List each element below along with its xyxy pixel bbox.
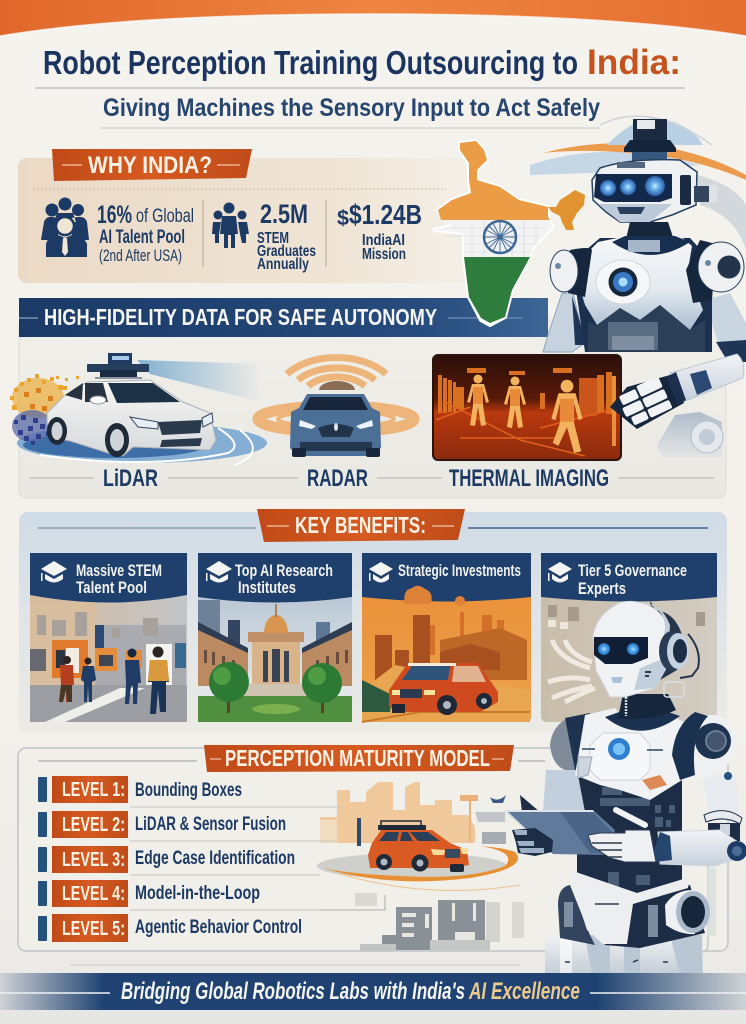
level 3: LEVEL 3: xyxy=(62,849,125,871)
card headers xyxy=(30,553,717,606)
level 1: Bounding Boxes xyxy=(135,780,242,801)
level 3: Edge Case Identification xyxy=(135,848,295,869)
illustration: radar car xyxy=(258,357,414,457)
panel: high-fidelity data xyxy=(10,298,726,498)
legs xyxy=(545,935,703,975)
badge: perception maturity model: PERCEPTION MATURITY MODEL xyxy=(225,745,490,771)
badge: key benefits: KEY BENEFITS: xyxy=(295,512,426,538)
level 1 xyxy=(38,776,242,803)
stat: AI talent pool: (2nd After USA) xyxy=(99,246,182,265)
footer banner: AI Excellence xyxy=(468,978,580,1005)
torso chest xyxy=(575,708,690,800)
icon: graduation cap xyxy=(41,561,67,582)
badge: why India: WHY INDIA? xyxy=(88,152,212,179)
upper arms xyxy=(543,293,746,362)
badge: why India xyxy=(52,149,252,181)
stat: IndiaAI mission: Mission xyxy=(362,246,406,263)
thermal figure xyxy=(467,374,489,426)
map of India xyxy=(433,141,585,325)
level 5 xyxy=(38,914,302,942)
stat: STEM graduates: Graduates xyxy=(257,243,316,260)
smoke puffs xyxy=(404,586,465,606)
label: radar: RADAR xyxy=(307,465,368,492)
stat: IndiaAI mission: IndiaAI xyxy=(362,232,405,249)
level 2: LiDAR & Sensor Fusion xyxy=(135,814,286,835)
header band xyxy=(0,0,746,36)
card text: Tier 5 Governance xyxy=(578,561,687,580)
robot: upper, pointing xyxy=(530,116,746,458)
left hand xyxy=(512,828,553,856)
label: thermal imaging: THERMAL IMAGING xyxy=(449,465,609,492)
title: Robot Perception Training Outsourcing to xyxy=(43,44,578,81)
hips xyxy=(558,870,710,948)
fingers xyxy=(616,376,673,427)
swoosh backdrop xyxy=(530,116,746,250)
scene: city and vehicle xyxy=(317,782,524,951)
stat: STEM graduates: Annually xyxy=(257,256,309,273)
title: India: xyxy=(587,43,681,82)
dark torso xyxy=(577,770,682,900)
stat: IndiaAI mission: $ xyxy=(337,207,349,230)
stat: IndiaAI mission: $1.24B xyxy=(349,199,422,230)
illustration: LiDAR car xyxy=(10,353,267,465)
car body xyxy=(47,353,216,457)
head and headset xyxy=(593,600,699,719)
level 2 xyxy=(38,811,286,838)
headset xyxy=(659,631,699,697)
point cloud xyxy=(10,374,79,445)
tablet xyxy=(503,795,615,855)
hip xyxy=(657,412,723,458)
shoulders and upper arms xyxy=(543,713,742,841)
scene vehicle xyxy=(368,821,469,872)
level 1: LEVEL 1: xyxy=(62,779,125,801)
icon: graduation cap xyxy=(369,562,393,582)
torso xyxy=(572,236,712,352)
level 4: Model-in-the-Loop xyxy=(135,883,260,904)
panel: key benefits xyxy=(19,509,727,733)
panel: perception maturity model xyxy=(18,745,728,951)
stat: AI talent pool xyxy=(97,201,194,265)
thermal figure xyxy=(551,380,583,453)
stat: AI talent pool: 16% xyxy=(97,201,132,229)
card: tier 5 governance experts xyxy=(541,590,717,722)
scene factory xyxy=(320,893,524,951)
icon: graduates group xyxy=(212,202,249,248)
footer banner xyxy=(0,965,746,1024)
antenna xyxy=(624,119,676,161)
level 4 xyxy=(38,880,260,907)
card text xyxy=(76,561,687,598)
card: massive STEM talent pool xyxy=(30,590,187,722)
icon: graduation cap xyxy=(206,561,232,582)
label: LiDAR: LiDAR xyxy=(103,465,158,492)
level 3 xyxy=(38,846,295,873)
stat: STEM graduates xyxy=(257,199,316,273)
icon: talent group xyxy=(41,198,89,257)
people xyxy=(59,646,169,714)
illustration: thermal imaging xyxy=(433,355,621,460)
robot: lower, with tablet and headset xyxy=(503,600,746,975)
card text: Top AI Research xyxy=(235,561,333,580)
level 2: LEVEL 2: xyxy=(62,814,125,836)
outline panel xyxy=(690,860,708,952)
right shoulder xyxy=(686,240,744,303)
left shoulder xyxy=(550,248,592,297)
stylus xyxy=(616,810,645,825)
ashoka chakra xyxy=(484,221,516,253)
card text: Institutes xyxy=(238,578,296,597)
card text: Massive STEM xyxy=(76,561,162,580)
footer banner: Bridging Global Robotics Labs with India's xyxy=(121,978,465,1005)
card: strategic investments xyxy=(362,590,531,722)
card text: Experts xyxy=(578,579,626,598)
banner: high-fidelity data xyxy=(19,298,548,337)
icon: graduation cap xyxy=(548,562,572,582)
stat: STEM graduates: STEM xyxy=(257,230,289,247)
panel: why India xyxy=(18,149,488,283)
stat: AI talent pool: AI Talent Pool xyxy=(99,227,185,248)
banner: high-fidelity data: HIGH-FIDELITY DATA FOR SAFE AUTONOMY xyxy=(44,304,437,330)
right shoulder xyxy=(672,712,737,780)
level 4: LEVEL 4: xyxy=(62,883,125,905)
NE states xyxy=(548,190,585,230)
badge: key benefits xyxy=(257,509,465,542)
forearm and right hand xyxy=(588,830,746,866)
card text: Talent Pool xyxy=(76,578,147,597)
stat: STEM graduates: 2.5M xyxy=(260,199,308,229)
card: top AI research institutes xyxy=(198,590,352,722)
level 5: Agentic Behavior Control xyxy=(135,917,302,938)
forearm and hand xyxy=(610,354,744,429)
level 5: LEVEL 5: xyxy=(62,918,125,940)
thermal figure xyxy=(504,376,526,428)
head xyxy=(592,160,717,222)
stat: AI talent pool: of Global xyxy=(136,206,194,227)
stat: IndiaAI mission xyxy=(337,199,422,263)
subtitle: Giving Machines the Sensory Input to Act Safely xyxy=(103,94,600,122)
neck xyxy=(625,222,675,243)
card text: Strategic Investments xyxy=(398,561,521,580)
